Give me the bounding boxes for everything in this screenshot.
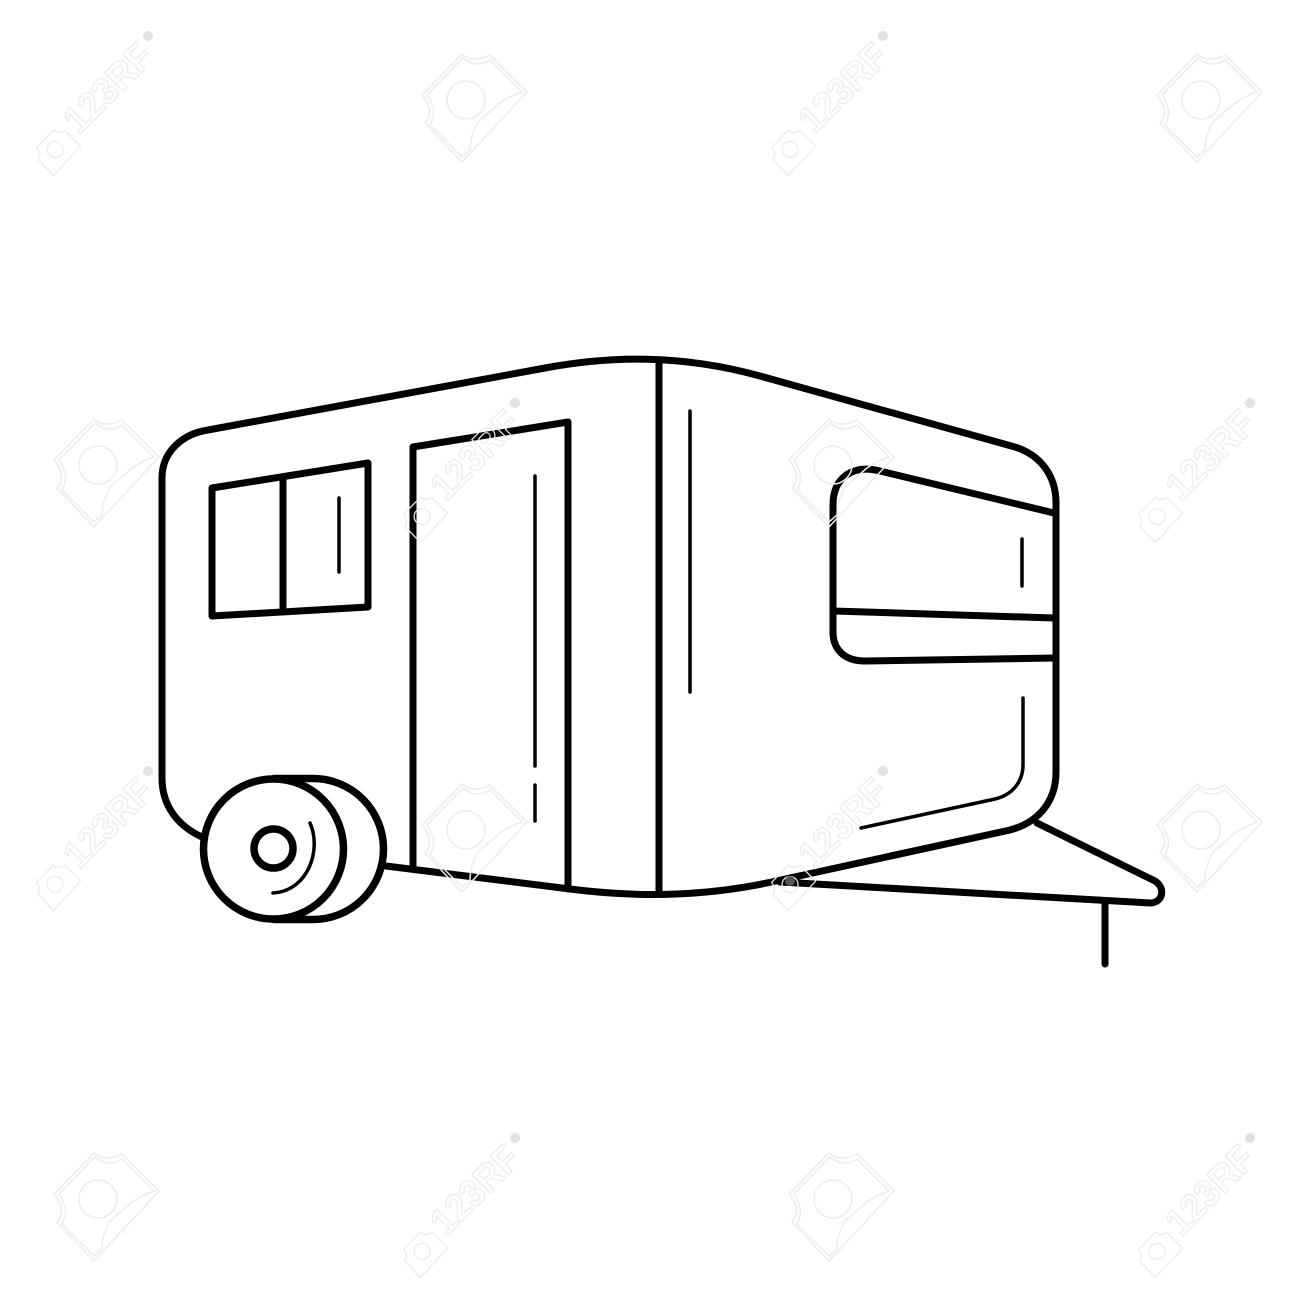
watermark logos with 123RF text: 123RF bbox=[1158, 1138, 1264, 1244]
watermark logos with 123RF text: 123RF bbox=[791, 36, 897, 142]
door glare bbox=[533, 476, 537, 821]
trailer body outline bbox=[162, 359, 1056, 894]
window glare bbox=[337, 498, 341, 572]
front window bbox=[833, 469, 1054, 661]
watermark logos with 123RF text: 123RF bbox=[56, 771, 162, 877]
jack stand bbox=[1102, 903, 1108, 964]
tow hitch bbox=[780, 823, 1162, 903]
door bbox=[413, 422, 568, 889]
watermark dot over hitch bbox=[785, 876, 795, 886]
watermark logos with 123RF text: 123RF bbox=[1158, 403, 1264, 509]
body corner divider bbox=[656, 362, 662, 893]
side window bbox=[212, 463, 368, 616]
wheel bbox=[204, 778, 384, 920]
front lower trim bbox=[861, 698, 1023, 828]
watermark logos with 123RF text: 123RF bbox=[423, 1138, 529, 1244]
watermark logos with 123RF text: 123RF bbox=[56, 36, 162, 142]
watermark logos with 123RF text: 123RF bbox=[423, 403, 529, 509]
wheel tread detail bbox=[273, 823, 314, 893]
front window glare bbox=[1020, 539, 1024, 586]
watermark logos with 123RF text: 123RF bbox=[791, 771, 897, 877]
front panel highlight bbox=[688, 411, 692, 692]
